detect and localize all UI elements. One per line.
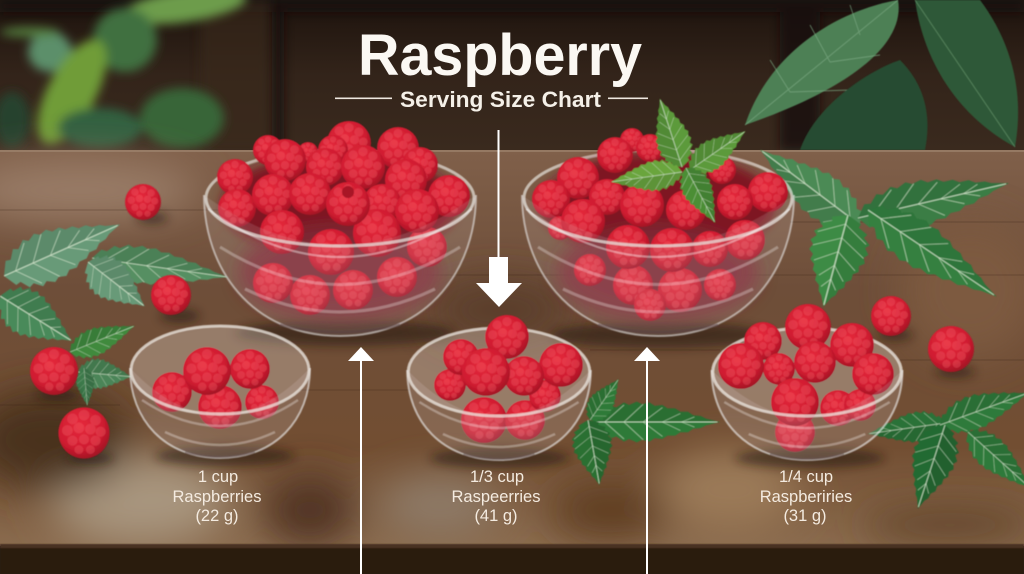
panel: 2 large bowl right bbox=[522, 93, 794, 336]
leaves by small bowl center bbox=[568, 371, 720, 489]
mint sprig on bowl bbox=[609, 93, 755, 230]
background foliage left bbox=[0, 0, 249, 154]
glass bowl bbox=[204, 195, 476, 336]
glass bowl bbox=[522, 195, 794, 336]
glass bowl bbox=[712, 370, 902, 460]
panel: 4 small bowl center, 1/3 cup bbox=[407, 315, 591, 460]
panel: 3 small bowl left, 1 cup bbox=[130, 326, 310, 458]
label: 1/4 cup: 1/4 cup bbox=[779, 468, 833, 486]
subtitle with side rules: Serving Size Chart bbox=[400, 87, 602, 112]
raspberries bbox=[718, 304, 894, 452]
glass bowl bbox=[407, 370, 591, 460]
label: 1 cup: Raspberries bbox=[173, 488, 261, 506]
arrow: up to right large bowl bbox=[634, 347, 660, 574]
leaves on table: left bbox=[0, 200, 231, 407]
leaves on table: right of large bowl bbox=[746, 131, 1014, 317]
background foliage right bbox=[745, 0, 1018, 150]
background: wooden wall bbox=[0, 0, 1024, 152]
label: 1 cup: 1 cup bbox=[198, 468, 238, 486]
shadows beneath bowls and berries bbox=[36, 212, 975, 468]
wooden table bbox=[0, 150, 1024, 546]
raspberries bbox=[152, 347, 279, 429]
arrow: up to left large bowl bbox=[348, 347, 374, 574]
raspberries in large bowl left bbox=[217, 121, 470, 320]
label: 1/3 cup: Raspeerries bbox=[452, 488, 540, 506]
arrow: down from title bbox=[476, 130, 522, 307]
raspberries in large bowl right bbox=[532, 128, 788, 321]
label: 1 cup: (22 g) bbox=[195, 507, 239, 525]
table front edge bbox=[0, 544, 1024, 574]
label: 1/4 cup: Raspberiries bbox=[760, 488, 852, 506]
label: 1/3 cup: (41 g) bbox=[474, 507, 518, 525]
title: Raspberry bbox=[358, 23, 642, 88]
label: 1/4 cup: (31 g) bbox=[783, 507, 827, 525]
panel: 1 large bowl left bbox=[204, 121, 476, 336]
raspberries bbox=[434, 315, 583, 443]
label: 1/3 cup: 1/3 cup bbox=[470, 468, 524, 486]
leaves bottom right bbox=[866, 376, 1024, 516]
loose raspberries bbox=[30, 184, 974, 459]
glass bowl bbox=[130, 368, 310, 458]
panel: 5 small bowl right, 1/4 cup bbox=[712, 304, 902, 460]
